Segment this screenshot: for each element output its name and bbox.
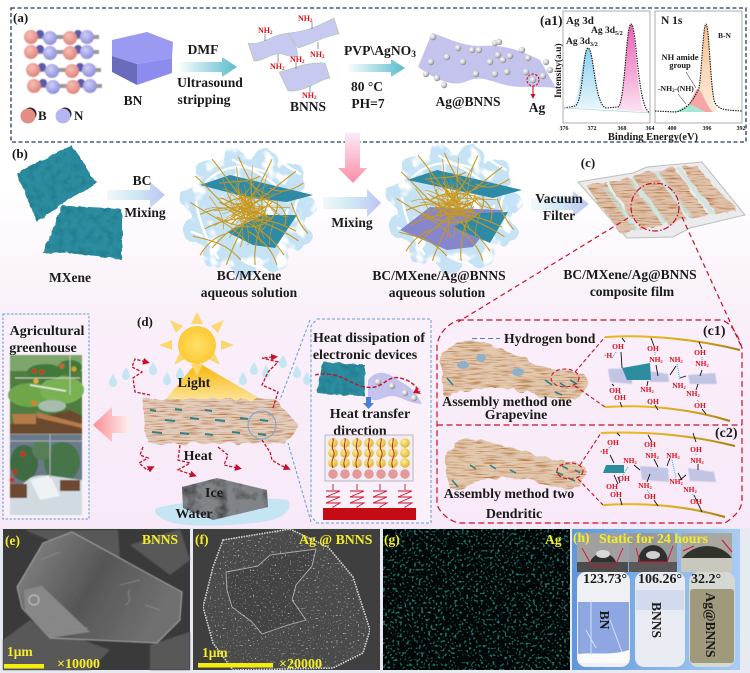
SEM background <box>3 529 190 670</box>
Ag@BNNS sheet with silver particles <box>418 33 556 88</box>
panel label (h): (h) <box>573 530 590 545</box>
c2 molecular diagram: OH <box>690 497 702 506</box>
BNNS nanosheets with NH2 groups: NH <box>290 55 302 64</box>
hydrogen bond legend: Hydrogen bond <box>504 331 596 346</box>
MXene and sheet with heat path <box>315 362 422 404</box>
c2 molecular diagram: OH <box>644 440 656 449</box>
water puddle <box>155 498 290 526</box>
Ag particle callout: Ag <box>529 100 545 115</box>
SEM background <box>193 529 380 670</box>
c2 molecular diagram: OH <box>618 474 630 483</box>
XPS chart N 1s <box>655 11 746 132</box>
BC mixing arrow: BC <box>133 173 151 188</box>
c2 molecular diagram <box>600 433 735 517</box>
contact angle values: 32.2° <box>691 572 721 587</box>
film caption: composite film <box>590 284 675 299</box>
pink downward arrow <box>338 133 367 183</box>
label (b): (b) <box>12 146 28 161</box>
BC/MXene solution sphere <box>180 148 316 277</box>
panel (c): composite film <box>458 155 745 348</box>
panel (b): BC/MXene solutions <box>12 144 589 300</box>
label (c2): (c2) <box>715 426 738 441</box>
scale bar: ×20000 <box>279 657 322 672</box>
c2 molecular diagram: NH <box>683 485 694 494</box>
Ag label: Ag <box>545 532 562 547</box>
greenhouse scene: winter crops <box>10 434 82 515</box>
heat arrows, dashed red <box>132 357 287 475</box>
XPS chart Ag 3d: 5/2 <box>615 31 623 37</box>
legend B and N atoms <box>20 108 84 124</box>
c1 molecular diagram: 2 <box>706 363 710 368</box>
XPS chart Ag 3d: Ag 3d <box>566 15 594 27</box>
c2 molecular diagram: NH <box>669 477 680 486</box>
BNNS label: BNNS <box>142 532 178 547</box>
XPS chart Ag 3d: 372 <box>588 126 596 132</box>
Ag@BNNS bottle <box>689 572 735 667</box>
XPS chart N 1s: -NH <box>658 84 672 93</box>
heat source bar <box>323 508 416 520</box>
BNNS nanosheets with NH2 groups: NH <box>302 91 314 100</box>
c1 molecular diagram: OH <box>647 397 659 406</box>
XPS chart Ag 3d <box>553 11 654 132</box>
film caption <box>563 267 697 299</box>
PVP AgNO3 arrow: PH=7 <box>351 96 385 111</box>
XPS chart N 1s: 396 <box>702 126 712 132</box>
Ag@BNNS caption: Ag@BNNS <box>435 94 501 109</box>
zoom circle on film <box>248 411 276 439</box>
BNNS nanosheets with NH2 groups: 2 <box>302 60 305 65</box>
Heat label: Heat <box>184 449 213 464</box>
main flake <box>17 532 182 643</box>
panel (c1)/(c2): assembly methods <box>437 320 742 523</box>
bottle labels <box>597 592 718 658</box>
scale bar <box>198 645 322 672</box>
c1 molecular diagram: NH <box>669 355 680 364</box>
c1 molecular diagram: OH <box>694 348 706 357</box>
PVP AgNO3 arrow: PVP\AgNO <box>344 43 411 58</box>
greenhouse heading: Agricultural <box>10 324 84 339</box>
c2 molecular diagram: OH <box>606 482 618 491</box>
dendritic fibre bundle <box>446 438 585 490</box>
BC mixing arrow: Mixing <box>124 205 166 220</box>
c2 molecular diagram: 2 <box>702 460 704 465</box>
Ag@BNNS label: Ag @ BNNS <box>299 532 373 547</box>
BNNS nanosheets with NH2 groups: 2 <box>314 96 317 101</box>
label (a): (a) <box>13 10 28 25</box>
c1 molecular diagram: OH <box>614 393 626 402</box>
c2 molecular diagram: OH <box>644 492 656 501</box>
c2 molecular diagram: 2 <box>650 485 652 490</box>
teal dots on black <box>383 529 570 670</box>
contact angle photos <box>577 533 732 572</box>
panel: heat dissipation of electronic devices <box>280 319 431 523</box>
XPS chart N 1s: group <box>669 60 691 70</box>
c2 molecular diagram: NH <box>638 481 650 490</box>
label (d): (d) <box>137 314 153 329</box>
c1 molecular diagram: 2 <box>680 359 684 364</box>
dashed divider <box>437 424 742 426</box>
BNNS nanosheets with NH2 groups: 2 <box>310 19 313 24</box>
XPS chart N 1s: B-N <box>718 31 732 40</box>
XPS chart N 1s: 400 <box>668 126 676 132</box>
BN caption: BN <box>124 93 143 108</box>
panel label (g): (g) <box>384 532 400 547</box>
contact angle values <box>583 572 721 587</box>
c2 molecular diagram: ·H <box>600 447 608 456</box>
water droplets <box>109 355 311 387</box>
label (c1): (c1) <box>703 324 726 339</box>
bottle labels: BNNS <box>649 602 664 638</box>
panel (d): radiative cooling film <box>109 312 311 526</box>
c1 molecular diagram: NH <box>672 381 684 390</box>
panel label (e): (e) <box>5 533 20 548</box>
film cross-section <box>142 399 298 444</box>
DMF ultrasound arrow <box>177 42 243 107</box>
panel (f): SEM of Ag@BNNS <box>193 529 380 672</box>
spheroid flake with particles <box>203 529 370 670</box>
chamfered frame <box>311 319 431 523</box>
dendritic captions: Assembly method two <box>444 487 574 502</box>
ice block <box>182 478 268 520</box>
back flakes <box>3 529 190 670</box>
c1 molecular diagram: ·H <box>604 351 612 360</box>
c1 molecular diagram: 2 <box>698 393 700 398</box>
BC/MXene caption <box>201 268 298 300</box>
c1 molecular diagram: OH <box>694 401 706 410</box>
BNNS caption: BNNS <box>290 99 326 114</box>
BNNS bottle <box>635 572 685 667</box>
legend B and N atoms: B <box>38 108 47 123</box>
light beam <box>165 362 266 402</box>
DMF ultrasound arrow: DMF <box>188 42 218 57</box>
panel (h): dispersion bottles and contact angles <box>572 529 740 670</box>
BC/MXene/Ag@BNNS caption <box>372 268 506 300</box>
BNNS nanosheets with NH2 groups: NH <box>258 26 270 35</box>
vacuum filter arrow: Filter <box>543 208 575 223</box>
c1 molecular diagram: 2 <box>660 359 664 364</box>
BC/MXene caption: BC/MXene <box>217 268 281 283</box>
BC/MXene caption: aqueous solution <box>201 285 298 300</box>
c1 molecular diagram: 2 <box>684 385 686 390</box>
dendritic captions: Dendritic <box>486 507 542 522</box>
c1 molecular diagram: NH <box>686 389 698 398</box>
pink arrow to greenhouse <box>93 407 130 442</box>
Ice and Water labels: Ice <box>205 486 223 501</box>
MXene sheets <box>17 145 122 260</box>
blue downward arrow <box>363 397 374 409</box>
scale bar: 1μm <box>202 645 228 660</box>
grapevine captions: Assembly method one <box>442 395 572 410</box>
greenhouse heading <box>9 324 84 356</box>
c1 molecular diagram: 2 <box>652 389 654 394</box>
dashed zoom lines <box>458 217 742 348</box>
scale bar <box>4 644 100 672</box>
BC/MXene/Ag@BNNS caption: aqueous solution <box>389 285 486 300</box>
c2 molecular diagram: 2 <box>656 455 660 460</box>
c2 molecular diagram: NH <box>690 456 702 465</box>
scale bar: ×10000 <box>57 657 100 672</box>
sun icon <box>159 312 234 376</box>
XPS chart N 1s: 392 <box>736 126 746 132</box>
atom lattice with heat path <box>325 435 413 481</box>
c1 molecular diagram <box>604 336 740 421</box>
axis title Binding Energy: Binding Energy(eV) <box>608 132 699 143</box>
c1 molecular diagram: NH <box>640 385 652 394</box>
Ice and Water labels: Water <box>175 507 213 522</box>
XPS chart N 1s: N 1s <box>661 15 683 27</box>
heat transfer direction text <box>330 407 410 439</box>
greenhouse frame <box>3 314 89 519</box>
c1 molecular diagram: NH <box>649 355 660 364</box>
XPS chart Ag 3d: 376 <box>560 126 568 132</box>
XPS chart Ag 3d: Ag 3d <box>591 26 615 36</box>
PVP AgNO3 arrow: 3 <box>411 50 416 60</box>
label (a1): (a1) <box>540 13 562 28</box>
XPS chart N 1s: 2 <box>672 89 675 94</box>
XPS chart N 1s: -(NH) <box>675 84 694 93</box>
BC mixing arrow <box>107 173 166 220</box>
heading <box>313 331 425 363</box>
Ice and Water labels <box>175 486 223 522</box>
c2 molecular diagram: 2 <box>634 460 638 465</box>
vacuum filter arrow <box>531 191 589 223</box>
c2 molecular diagram: NH <box>666 451 678 460</box>
c2 molecular diagram: NH <box>645 451 656 460</box>
static for 24 hours heading: Static for 24 hours <box>599 531 709 546</box>
film sheet <box>578 162 745 238</box>
DMF ultrasound arrow: Ultrasound <box>177 75 243 90</box>
film caption: BC/MXene/Ag@BNNS <box>563 267 697 282</box>
c2 molecular diagram: 2 <box>680 481 684 486</box>
bottle labels: BN <box>597 611 612 630</box>
BN hexagonal block <box>112 32 173 85</box>
c1 molecular diagram: NH <box>695 359 706 368</box>
c2 molecular diagram: OH <box>607 438 619 447</box>
heat transfer direction text: Heat transfer <box>330 407 410 422</box>
BN layered atoms <box>24 30 102 94</box>
BNNS nanosheets with NH2 groups: NH <box>310 50 322 59</box>
heat springs <box>326 484 412 509</box>
page background <box>0 0 750 528</box>
dendritic captions <box>444 487 574 522</box>
grapevine fibre bundle <box>441 340 587 400</box>
c1 molecular diagram: OH <box>647 344 659 353</box>
grapevine captions <box>442 395 572 423</box>
c1 molecular diagram: OH <box>609 386 621 395</box>
XPS chart Ag 3d: Intensity(a.u) <box>553 43 564 98</box>
c2 molecular diagram: 2 <box>694 489 698 494</box>
BC/MXene/Ag@BNNS caption: BC/MXene/Ag@BNNS <box>372 268 506 283</box>
Light label: Light <box>178 376 211 391</box>
heading: electronic devices <box>313 348 418 363</box>
XPS chart Ag 3d: 3/2 <box>590 42 598 48</box>
grapevine captions: Grapevine <box>485 408 547 423</box>
vacuum filter arrow: Vacuum <box>535 191 584 206</box>
blue backdrop <box>572 529 740 670</box>
c2 molecular diagram: OH <box>610 490 622 499</box>
BC/MXene/Ag@BNNS solution sphere <box>386 144 522 273</box>
scale bar: 1μm <box>7 644 33 659</box>
PVP AgNO3 arrow <box>344 43 416 111</box>
PVP AgNO3 arrow: 80 °C <box>351 79 383 94</box>
BNNS nanosheets with NH2 groups: NH <box>270 62 282 71</box>
legend B and N atoms: N <box>74 108 84 123</box>
heading: Heat dissipation of <box>313 331 425 346</box>
contact angle values: 123.73° <box>583 572 627 587</box>
panel: agricultural greenhouse <box>3 314 89 519</box>
panel (a): BNNS and Ag@BNNS preparation <box>11 8 746 143</box>
dendritic zoom callout <box>557 433 603 505</box>
bottle labels: Ag@BNNS <box>703 592 718 658</box>
dashed outer frame <box>437 320 742 523</box>
c2 molecular diagram: 2 <box>678 455 680 460</box>
bottom band background <box>0 528 750 673</box>
MXene caption: MXene <box>49 270 91 285</box>
greenhouse scene: summer crops <box>8 355 84 434</box>
label (c): (c) <box>581 155 595 170</box>
connector lines to film <box>280 320 311 522</box>
heat transfer direction text: direction <box>333 424 387 439</box>
BNNS nanosheets with NH2 groups: NH <box>298 14 310 23</box>
dashed frame of panel (a) <box>11 8 746 142</box>
contact angle values: 106.26° <box>638 572 682 587</box>
panel (e): SEM of BNNS <box>3 529 190 672</box>
BNNS nanosheets with NH2 groups: 2 <box>322 55 325 60</box>
XPS chart N 1s: NH amide <box>661 52 699 62</box>
BNNS nanosheets with NH2 groups: 2 <box>282 67 285 72</box>
BN bottle <box>577 572 630 667</box>
mixing arrow: Mixing <box>331 215 373 230</box>
mixing arrow <box>323 189 381 230</box>
panel (g): Ag elemental map <box>383 529 570 670</box>
c2 molecular diagram: OH <box>690 445 702 454</box>
BNNS nanosheets with NH2 groups: 2 <box>270 31 273 36</box>
DMF ultrasound arrow: stripping <box>178 92 231 107</box>
c2 molecular diagram: NH <box>623 456 634 465</box>
zoom circle on film <box>631 183 679 231</box>
panel label (f): (f) <box>195 532 208 547</box>
XPS chart Ag 3d: 364 <box>646 126 654 132</box>
XPS chart Ag 3d: Ag 3d <box>566 37 590 47</box>
Ag particle callout <box>527 74 545 115</box>
BNNS nanosheets with NH2 groups <box>248 14 339 101</box>
grapevine zoom callout <box>551 337 605 407</box>
XPS chart Ag 3d: 368 <box>618 126 626 132</box>
greenhouse heading: greenhouse <box>9 341 77 356</box>
c1 molecular diagram: OH <box>612 342 624 351</box>
